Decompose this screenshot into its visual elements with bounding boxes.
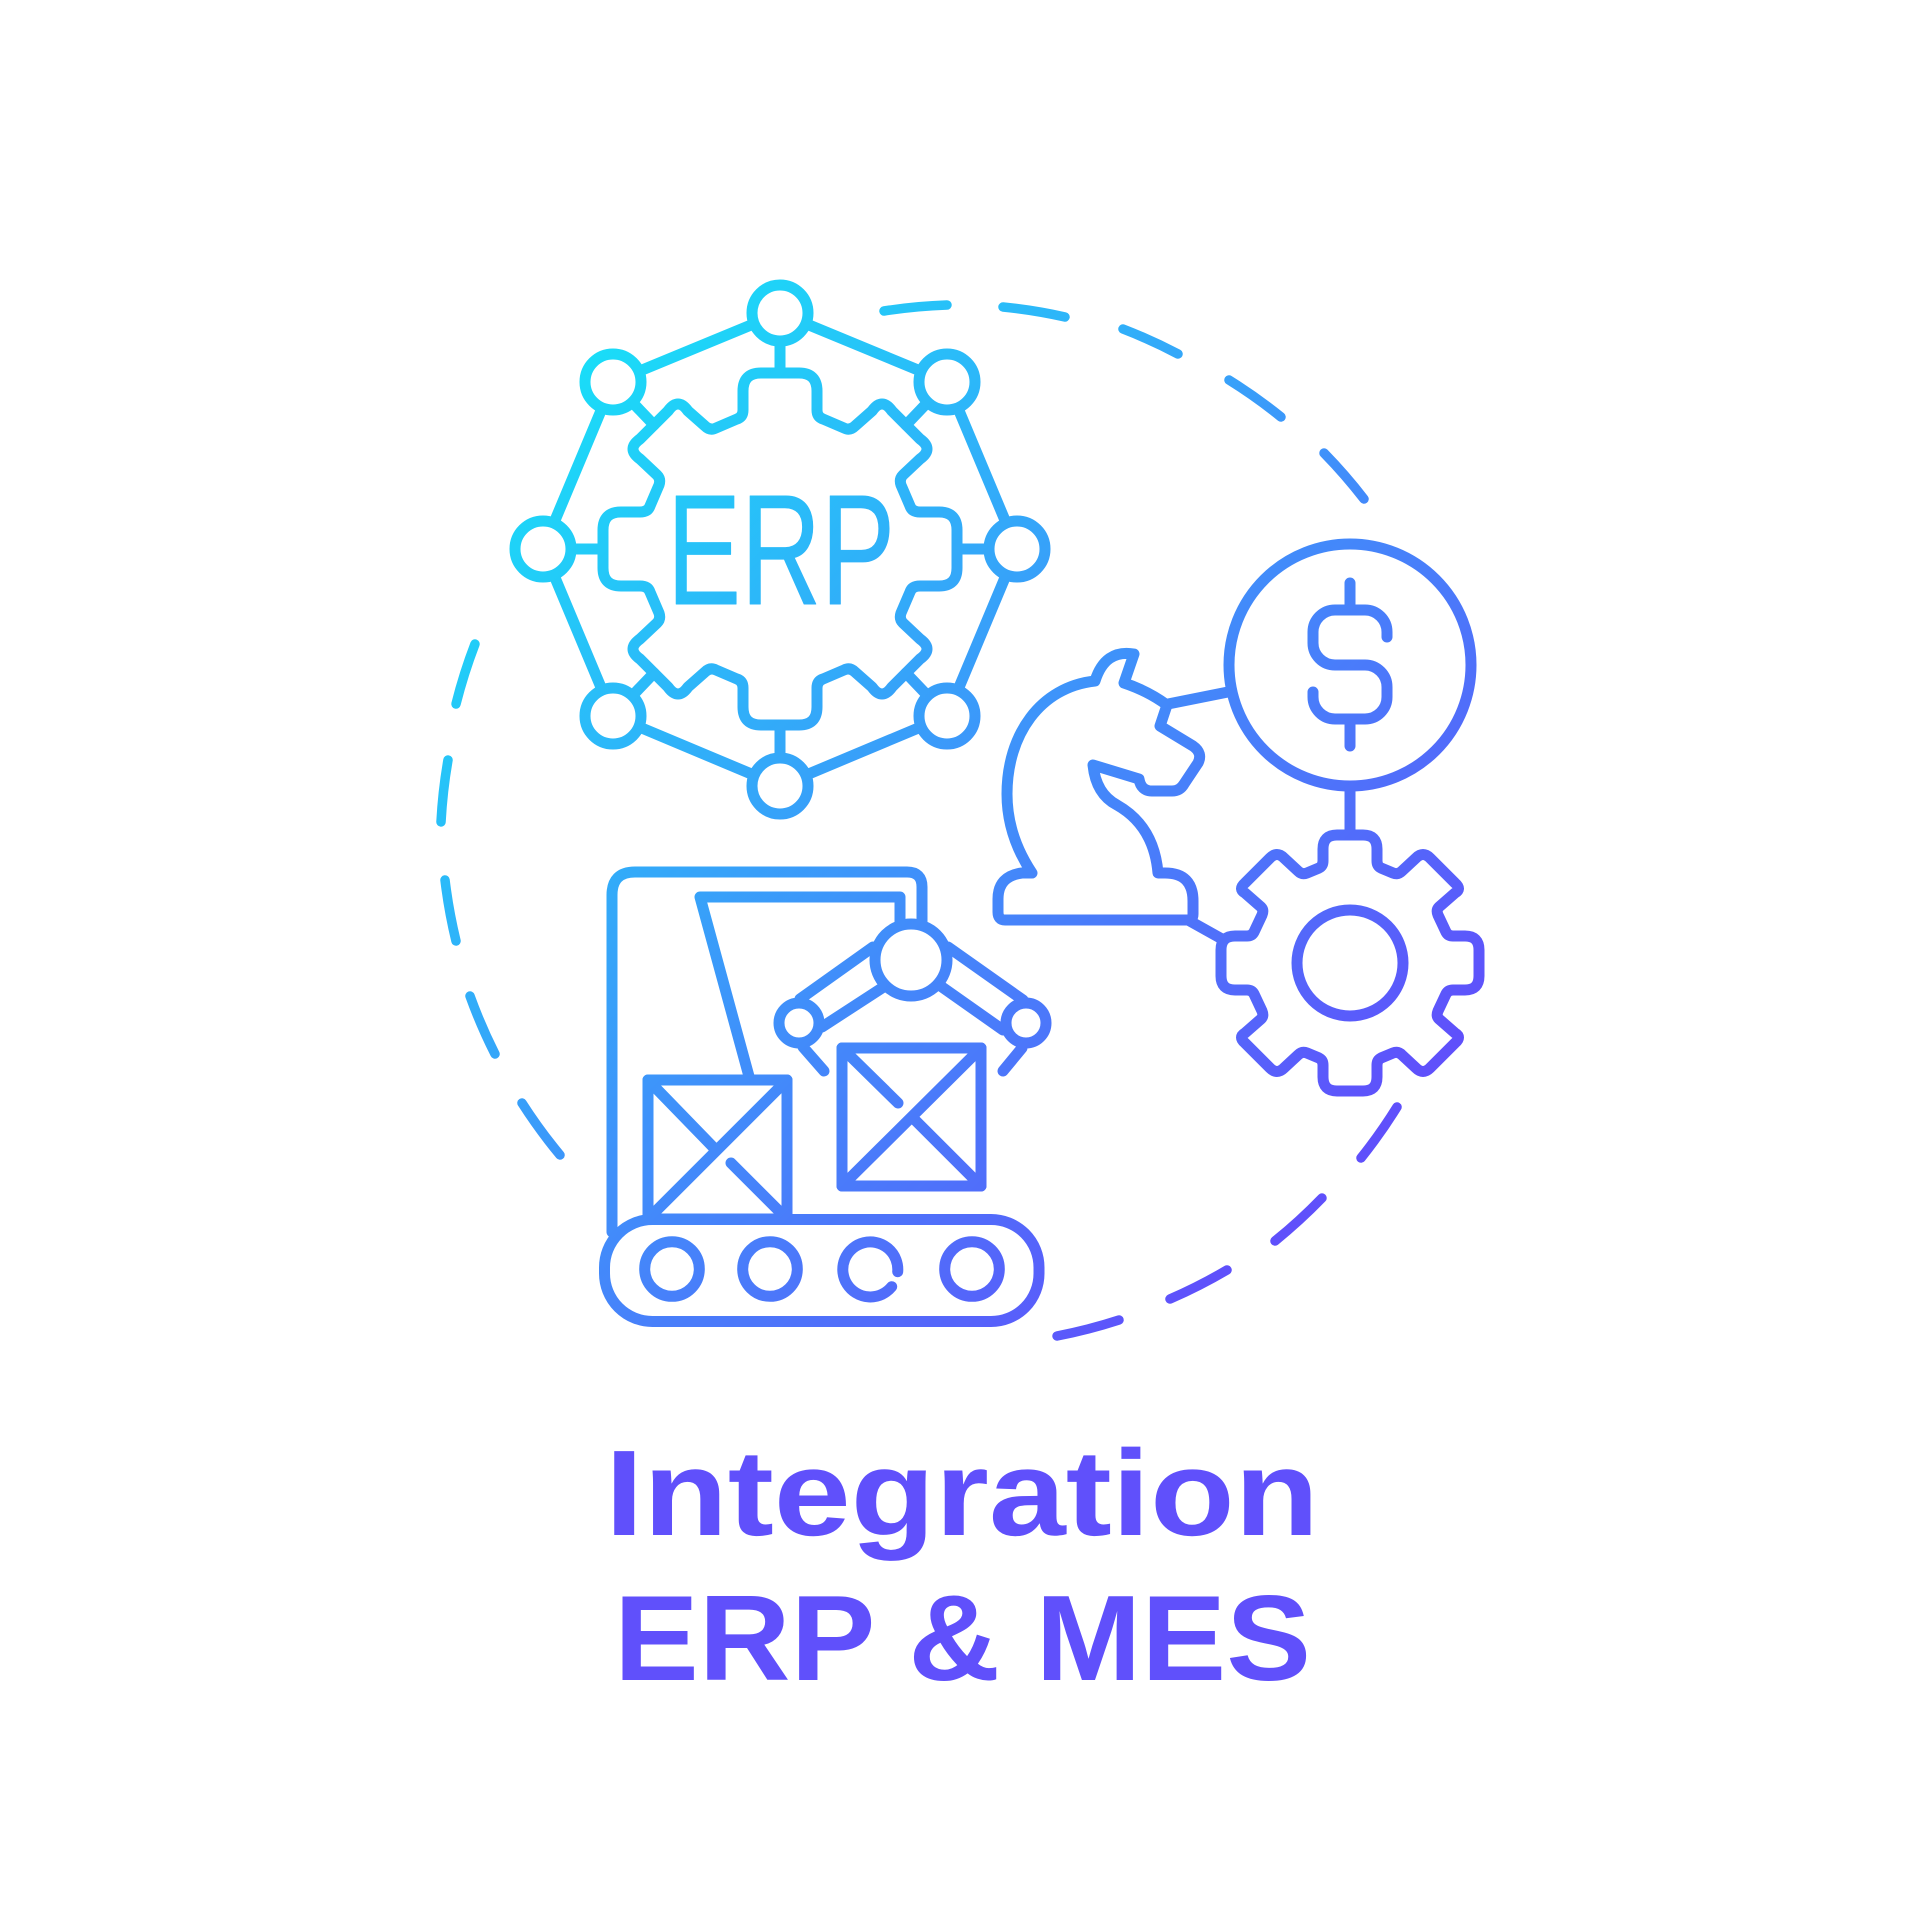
title: ERP & MES xyxy=(614,1570,1311,1706)
network octagon links xyxy=(543,313,1017,786)
conveyor rollers xyxy=(645,1242,999,1297)
icon: dollar coin xyxy=(1229,544,1471,786)
crate right xyxy=(842,1048,981,1186)
icon: robotic conveyor xyxy=(604,872,1046,1322)
ERP label: ERP xyxy=(667,463,895,638)
machine frame xyxy=(612,872,922,1232)
crate left xyxy=(648,1080,787,1219)
gear spokes xyxy=(543,313,1017,786)
icon: chess knight xyxy=(998,653,1200,920)
robot joints xyxy=(779,924,1046,1043)
connector lines xyxy=(1168,692,1350,939)
robot arms xyxy=(800,947,1023,1071)
icon: strategy, money and gear cluster xyxy=(998,544,1479,1091)
title: Integration xyxy=(605,1425,1319,1561)
conveyor belt xyxy=(604,1220,1039,1322)
network nodes xyxy=(515,285,1045,814)
robot mount xyxy=(700,897,900,1080)
ERP gear outline xyxy=(603,373,957,725)
title xyxy=(605,1425,1319,1706)
dashed circle ring xyxy=(441,305,1397,1336)
icon: ERP gear network xyxy=(515,285,1045,814)
icon: gear xyxy=(1221,835,1479,1091)
